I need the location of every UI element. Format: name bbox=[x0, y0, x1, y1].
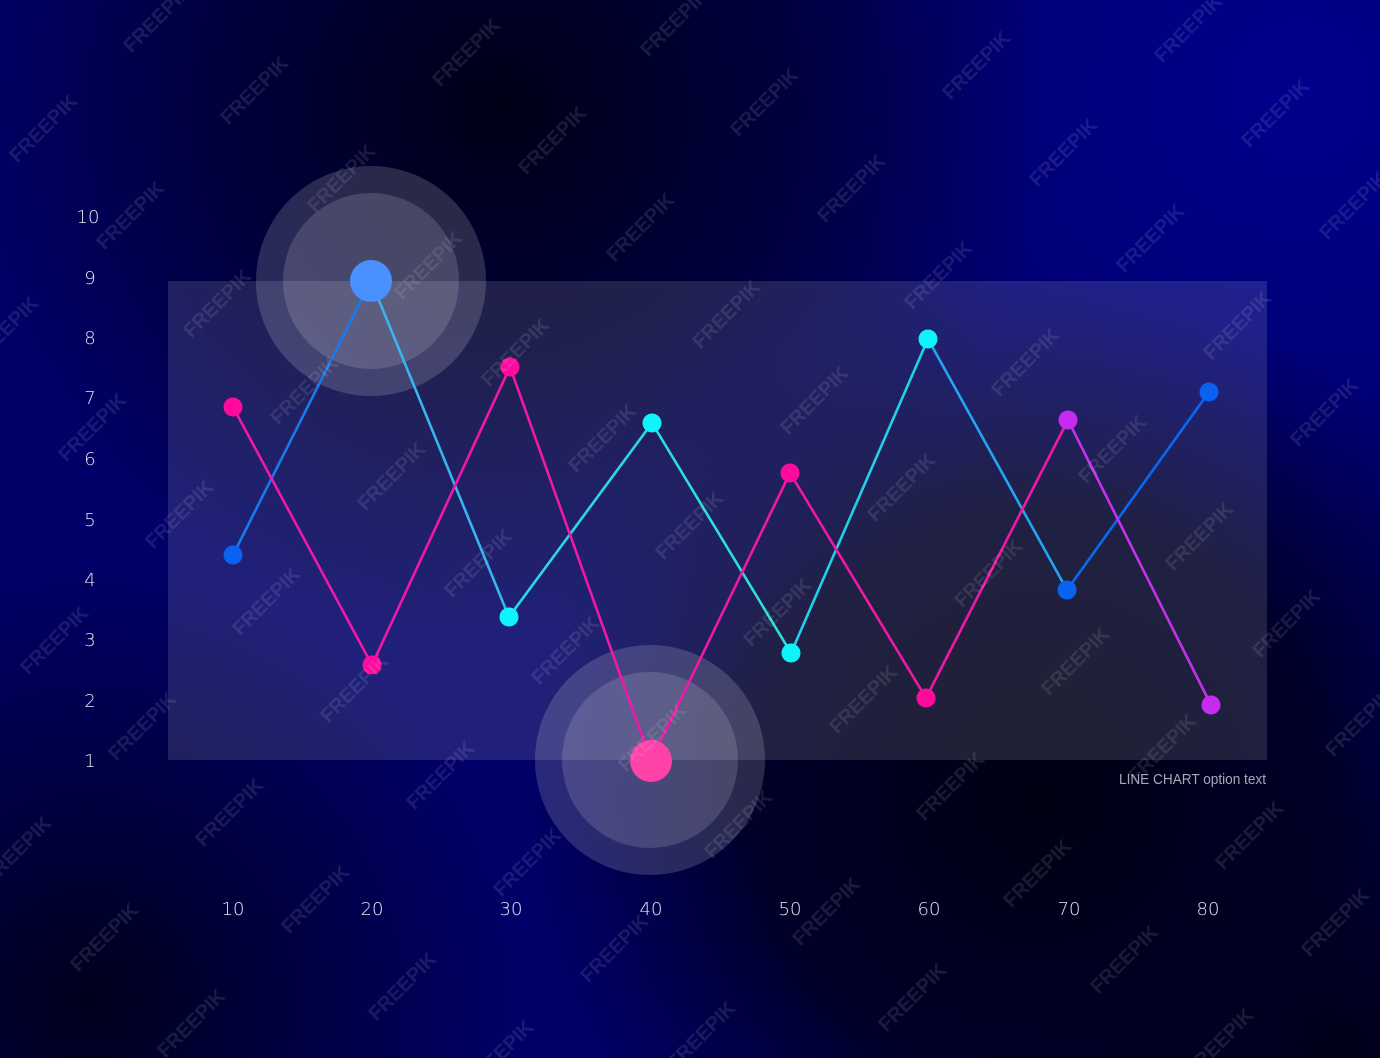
watermark pattern: FREEPIK bbox=[303, 140, 381, 217]
x axis labels: 40 bbox=[640, 899, 662, 920]
watermark pattern: FREEPIK bbox=[999, 835, 1077, 912]
watermark pattern: FREEPIK bbox=[987, 324, 1065, 401]
chart caption: LINE CHART option text bbox=[1119, 772, 1266, 788]
watermark pattern: FREEPIK bbox=[527, 612, 605, 689]
watermark pattern: FREEPIK bbox=[141, 476, 219, 553]
watermark pattern: FREEPIK bbox=[1112, 200, 1190, 277]
watermark pattern: FREEPIK bbox=[16, 602, 94, 679]
x axis labels: 10 bbox=[222, 899, 244, 920]
watermark pattern: FREEPIK bbox=[104, 688, 182, 765]
watermark pattern: FREEPIK bbox=[402, 737, 480, 814]
y axis labels: 9 bbox=[84, 268, 96, 289]
watermark pattern: FREEPIK bbox=[651, 487, 729, 564]
watermark pattern: FREEPIK bbox=[825, 661, 903, 738]
cyan series line bbox=[509, 339, 928, 653]
watermark pattern: FREEPIK bbox=[813, 150, 891, 227]
x axis labels: 80 bbox=[1197, 899, 1219, 920]
watermark pattern: FREEPIK bbox=[66, 899, 144, 976]
y axis labels bbox=[77, 207, 99, 772]
watermark pattern: FREEPIK bbox=[788, 873, 866, 950]
highlight halo: low at 40 bbox=[535, 645, 765, 875]
watermark pattern: FREEPIK bbox=[1286, 374, 1364, 451]
data points bbox=[224, 260, 1220, 782]
y axis labels: 1 bbox=[84, 751, 96, 772]
y axis labels: 6 bbox=[84, 449, 96, 470]
watermark pattern: FREEPIK bbox=[900, 237, 978, 314]
watermark pattern: FREEPIK bbox=[191, 774, 269, 851]
watermark pattern: FREEPIK bbox=[1237, 75, 1315, 152]
watermark pattern: FREEPIK bbox=[489, 824, 567, 901]
y axis labels: 7 bbox=[84, 388, 96, 409]
blue series line bbox=[233, 281, 1209, 617]
y axis labels: 10 bbox=[77, 207, 99, 228]
x axis labels: 30 bbox=[500, 899, 522, 920]
watermark pattern: FREEPIK bbox=[1074, 411, 1152, 488]
x axis labels bbox=[222, 899, 1219, 920]
y axis labels: 2 bbox=[84, 691, 96, 712]
watermark pattern: FREEPIK bbox=[688, 276, 766, 353]
watermark pattern: FREEPIK bbox=[602, 189, 680, 266]
watermark pattern: FREEPIK bbox=[1248, 585, 1326, 662]
y axis labels: 8 bbox=[84, 328, 96, 349]
watermark pattern: FREEPIK bbox=[179, 265, 257, 342]
watermark pattern: FREEPIK bbox=[1124, 710, 1202, 787]
watermark pattern: FREEPIK bbox=[1025, 114, 1103, 191]
watermark pattern: FREEPIK bbox=[776, 362, 854, 439]
watermark pattern: FREEPIK bbox=[1297, 884, 1375, 961]
watermark pattern: FREEPIK bbox=[576, 910, 654, 987]
watermark pattern: FREEPIK bbox=[353, 438, 431, 515]
watermark pattern: FREEPIK bbox=[440, 525, 518, 602]
watermark pattern: FREEPIK bbox=[514, 102, 592, 179]
watermark pattern: FREEPIK bbox=[390, 227, 468, 304]
watermark pattern: FREEPIK bbox=[277, 861, 355, 938]
watermark pattern: FREEPIK bbox=[726, 64, 804, 141]
watermark pattern: FREEPIK bbox=[477, 314, 555, 391]
watermark pattern: FREEPIK bbox=[92, 177, 170, 254]
watermark pattern: FREEPIK bbox=[316, 650, 394, 727]
watermark pattern: FREEPIK bbox=[428, 14, 506, 91]
x axis labels: 70 bbox=[1058, 899, 1080, 920]
purple series line bbox=[1068, 420, 1211, 705]
watermark pattern: FREEPIK bbox=[863, 449, 941, 526]
x axis labels: 50 bbox=[779, 899, 801, 920]
watermark pattern: FREEPIK bbox=[364, 948, 442, 1025]
y axis labels: 5 bbox=[84, 510, 96, 531]
watermark pattern: FREEPIK bbox=[614, 699, 692, 776]
watermark pattern: FREEPIK bbox=[874, 959, 952, 1036]
watermark pattern: FREEPIK bbox=[1199, 287, 1277, 364]
watermark pattern: FREEPIK bbox=[228, 563, 306, 640]
watermark pattern: FREEPIK bbox=[564, 400, 642, 477]
watermark pattern: FREEPIK bbox=[1037, 623, 1115, 700]
watermark pattern: FREEPIK bbox=[938, 27, 1016, 104]
watermark pattern: FREEPIK bbox=[739, 574, 817, 651]
x axis labels: 20 bbox=[361, 899, 383, 920]
watermark pattern: FREEPIK bbox=[5, 90, 83, 167]
watermark pattern: FREEPIK bbox=[1211, 797, 1289, 874]
y axis labels: 4 bbox=[84, 570, 96, 591]
highlight halo: peak at 20 bbox=[256, 166, 486, 396]
watermark pattern: FREEPIK bbox=[1161, 498, 1239, 575]
watermark pattern: FREEPIK bbox=[216, 52, 294, 129]
watermark pattern: FREEPIK bbox=[950, 535, 1028, 612]
pink series line bbox=[233, 367, 1068, 761]
watermark pattern: FREEPIK bbox=[1086, 921, 1164, 998]
watermark pattern: FREEPIK bbox=[912, 748, 990, 825]
y axis labels: 3 bbox=[84, 630, 96, 651]
watermark pattern: FREEPIK bbox=[266, 352, 344, 429]
translucent chart panel bbox=[168, 281, 1267, 760]
watermark pattern: FREEPIK bbox=[700, 786, 778, 863]
x axis labels: 60 bbox=[918, 899, 940, 920]
watermark pattern: FREEPIK bbox=[54, 389, 132, 466]
